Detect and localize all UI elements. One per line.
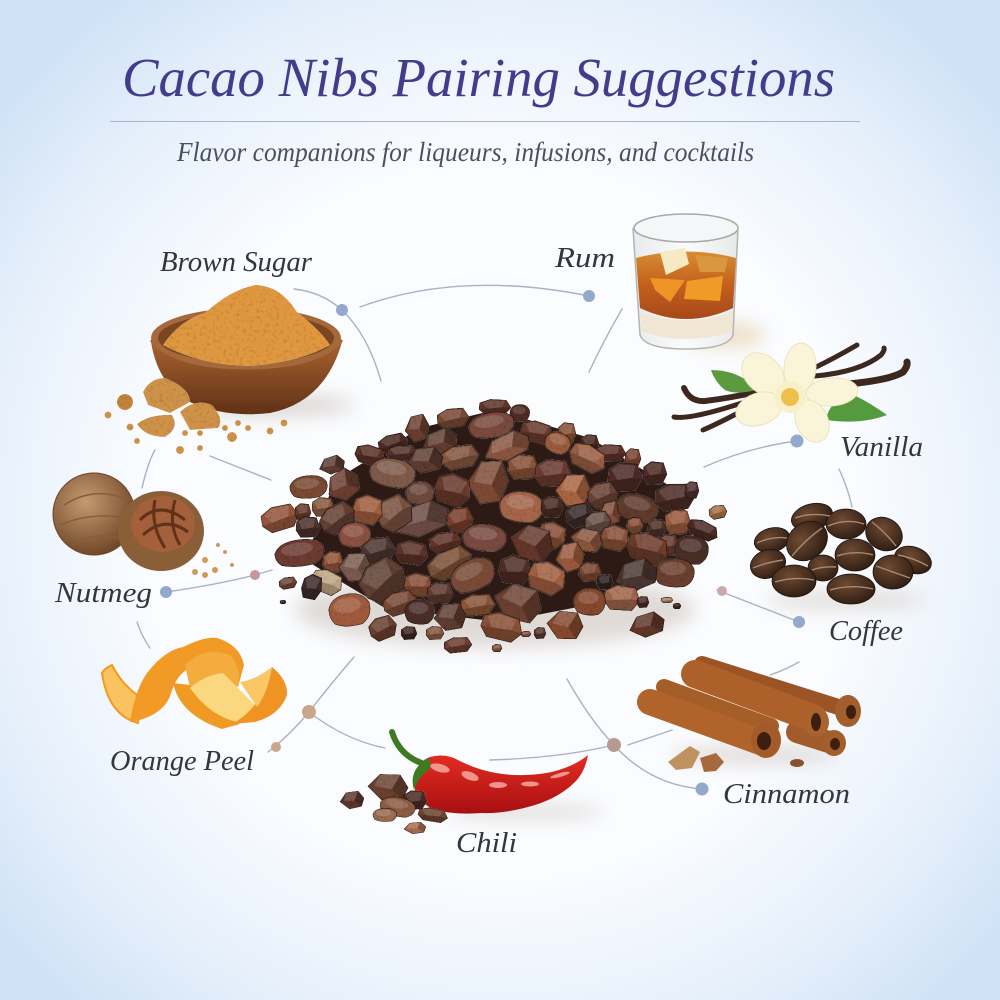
icon: chili pepper	[340, 732, 605, 834]
connector lines	[137, 285, 852, 789]
label: nutmeg: Nutmeg	[54, 577, 152, 609]
central pile of cacao nibs	[258, 399, 728, 654]
label: cinnamon: Cinnamon	[723, 778, 850, 810]
icon: cinnamon sticks	[650, 664, 861, 772]
icon: nutmeg	[53, 473, 234, 578]
icon: brown sugar bowl	[104, 285, 355, 454]
icon: coffee beans	[746, 499, 935, 610]
label: rum: Rum	[554, 242, 615, 274]
icon: orange peel	[102, 638, 287, 729]
label: coffee: Coffee	[829, 615, 903, 647]
title: Cacao Nibs Pairing Suggestions	[122, 47, 835, 108]
label: vanilla: Vanilla	[840, 431, 923, 463]
subtitle: Flavor companions for liqueurs, infusions, and cocktails	[176, 137, 754, 167]
connector dots	[160, 290, 805, 796]
icon: vanilla flower and pods	[674, 342, 907, 448]
sugar heap	[163, 285, 330, 366]
label: chili: Chili	[456, 827, 517, 859]
label: brown sugar: Brown Sugar	[160, 246, 313, 278]
chili nibs	[340, 770, 449, 834]
label: orange peel: Orange Peel	[110, 745, 254, 777]
icon: rum glass	[633, 214, 765, 349]
sugar lumps	[104, 378, 288, 454]
